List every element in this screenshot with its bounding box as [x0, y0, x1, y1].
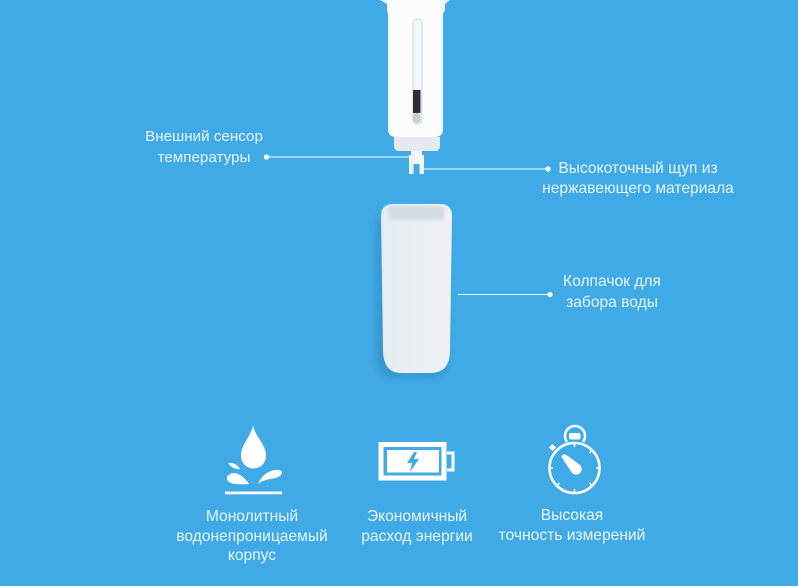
label: measuring accuracy: точность измерений [499, 526, 645, 544]
leader: probe [424, 166, 551, 172]
label: economical energy use: расход энергии [361, 528, 473, 544]
label: external temperature sensor [145, 128, 263, 166]
label: high-precision probe: Высокоточный щуп из [558, 160, 718, 177]
device: temperature sensor body [380, 0, 450, 174]
label: economical energy use: Экономичный [367, 508, 467, 525]
label: water sampling cap: Колпачок для [563, 273, 661, 290]
label: external temperature sensor: температуры [158, 149, 250, 166]
label: external temperature sensor: Внешний сенсор [145, 128, 263, 145]
label: high-precision probe: нержавеющего материала [542, 180, 734, 196]
icon: water drop [225, 425, 282, 494]
label: high-precision probe [542, 160, 734, 196]
water sampling cap [376, 204, 452, 378]
label: waterproof body: водонепроницаемый [176, 528, 328, 544]
leader: external sensor [264, 154, 410, 160]
label: water sampling cap: забора воды [566, 294, 658, 310]
icon: battery [381, 444, 453, 478]
label: measuring accuracy: Высокая [541, 507, 603, 524]
label: water sampling cap [563, 273, 661, 310]
leader: cap [458, 292, 553, 297]
label: waterproof body: корпус [228, 547, 276, 564]
icon: stopwatch [549, 426, 600, 493]
label: waterproof body: Монолитный [206, 508, 298, 525]
label: waterproof body [176, 508, 328, 564]
label: measuring accuracy [498, 507, 645, 544]
label: economical energy use [361, 508, 473, 544]
